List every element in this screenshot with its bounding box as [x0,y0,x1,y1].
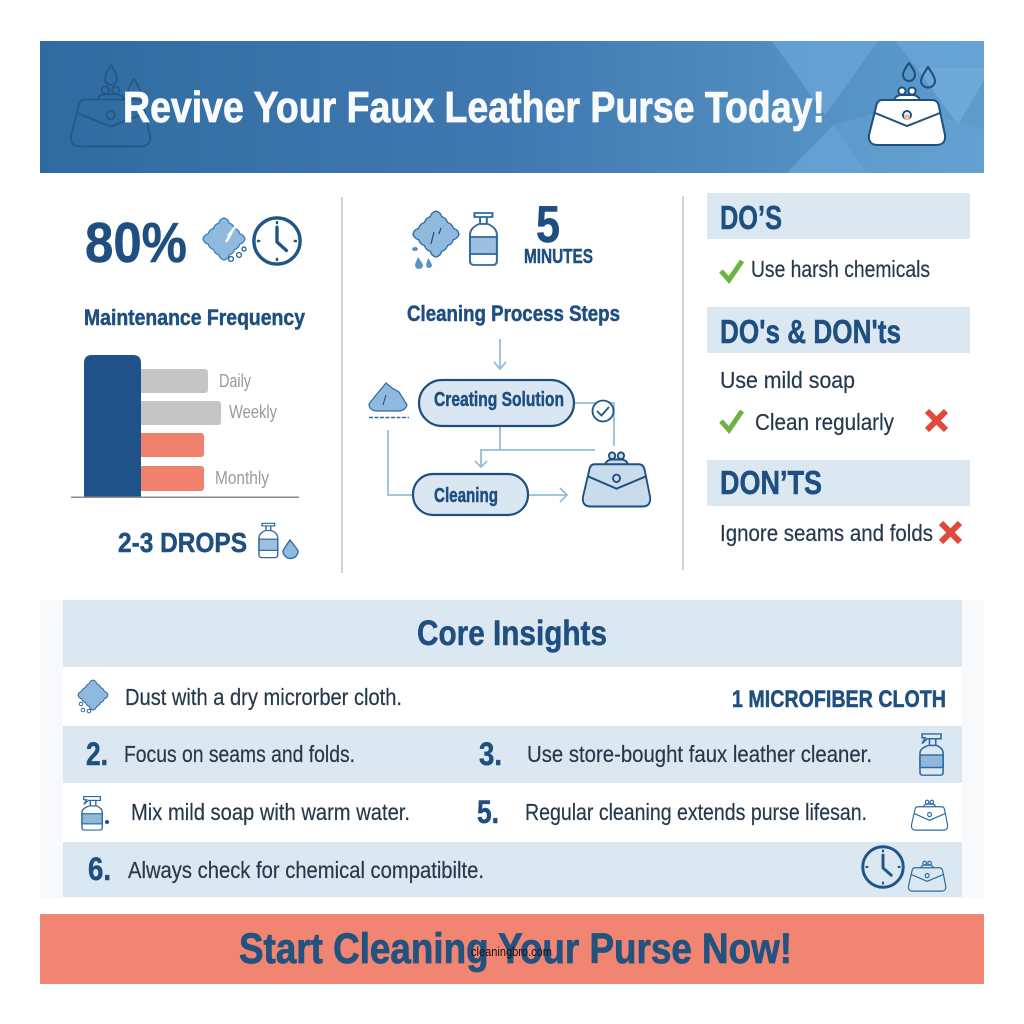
connectors and arrows [388,339,614,502]
watermark: cleaningbro.com [471,944,552,959]
number 2: 2. [86,736,108,772]
step: cleaning: Cleaning [434,485,498,507]
bar chart [71,355,299,498]
icon: small purse [908,861,946,891]
heading: cleaning process steps: Cleaning Process Steps [407,301,620,326]
icon: clock [254,218,300,264]
icon: small purse [911,800,948,830]
number 3: 3. [479,736,502,772]
stat: 5 minutes: MINUTES [524,246,593,268]
section: do's and don'ts [707,307,970,353]
section: don'ts [707,460,970,506]
call to action banner [40,914,984,984]
text: compatibility: Always check for chemical compatibilte. [128,857,484,883]
text: cleaner: Use store-bought faux leather cleaner. [527,741,872,767]
heading: maintenance frequency: Maintenance Frequency [84,305,306,330]
row 4 [88,847,946,891]
icon: wet cloth [412,211,459,269]
item: clean regularly: Clean regularly [755,409,894,435]
number 6: 6. [88,851,111,887]
icon: folded cloth [369,383,409,418]
section: do's and don'ts: DO's & DON'ts [720,313,901,350]
icon: spray bottle [82,797,102,830]
stat: 5 minutes: 5 [536,196,560,254]
icon: check badge [592,400,614,422]
icon: purse [583,452,650,507]
number 4 dot [105,820,109,824]
text: seams: Focus on seams and folds. [124,741,355,767]
item: ignore seams and folds: Ignore seams and folds [720,520,933,546]
title: Revive Your Faux Leather Purse Today! [123,83,825,132]
icon: small cloth [78,680,108,713]
bar chart: Weekly [229,402,277,422]
icon: drop [283,540,298,558]
bar chart: Daily [219,371,251,391]
stat: 5 minutes [524,196,593,268]
step: cleaning [413,474,528,515]
panel: cleaning process [369,196,650,515]
text: soap: Mix mild soap with warm water. [131,799,410,825]
panel divider left [341,197,343,573]
item: clean regularly [721,409,946,435]
callout: 1 microfiber cloth: 1 MICROFIBER CLOTH [732,686,946,713]
icon: bottle [259,523,278,558]
stat: 2-3 drops: 2-3 DROPS [118,527,247,558]
panel: core insights [40,600,984,898]
bar chart: Monthly [215,468,269,488]
section: do's [707,193,970,239]
number 5: 5. [477,794,499,830]
step: creating solution: Creating Solution [434,389,564,411]
icon: clock [863,847,903,887]
stat: 80%: 80% [85,211,187,275]
row 1 [78,680,946,713]
heading: core insights: Core Insights [417,614,607,653]
call to action banner: Start Cleaning Your Purse Now! [239,925,792,973]
title banner [40,41,984,173]
row 3 [82,794,948,830]
text: dust: Dust with a dry microrber cloth. [125,684,402,710]
panel: dos and donts [707,193,970,546]
panel: maintenance frequency [71,211,306,558]
icon: soap bottle [470,213,497,265]
text: lifespan: Regular cleaning extends purse lifesan. [525,799,867,825]
heading: core insights [63,600,962,667]
panel divider right [682,196,684,570]
item: use mild soap: Use mild soap [720,367,855,393]
icon: white purse with drops [869,63,945,145]
icon: faded purse with drops [71,65,150,146]
section: don'ts: DON’TS [720,464,822,501]
item: use harsh chemicals: Use harsh chemicals [751,256,930,282]
step: creating solution [419,380,574,426]
section: do's: DO’S [720,199,782,236]
icon: cloth [203,218,246,261]
row 2 [86,734,943,775]
icon: spray bottle [920,734,943,775]
